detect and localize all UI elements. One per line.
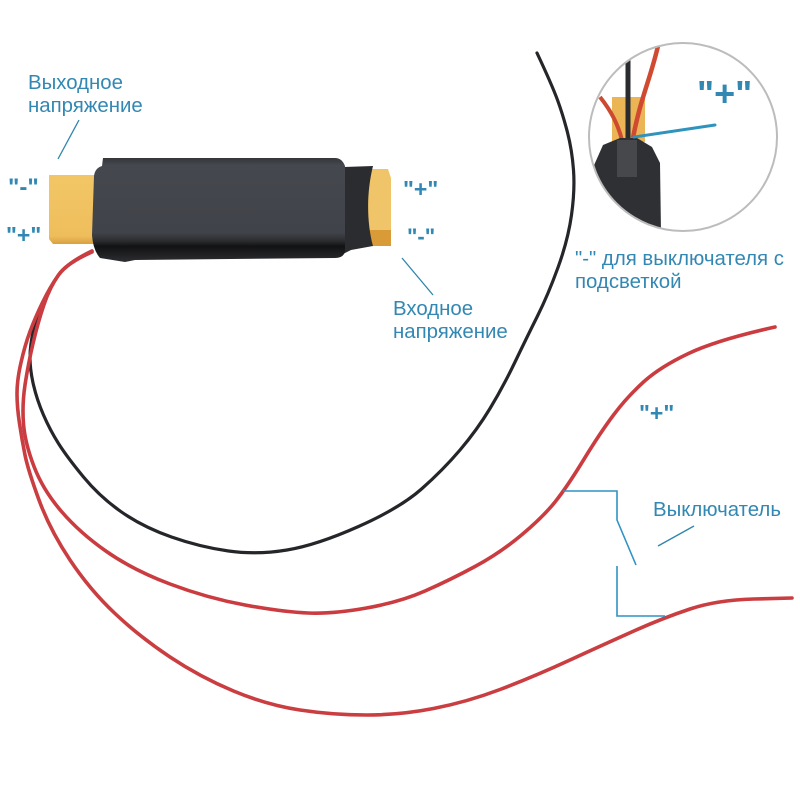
label: output voltage: Выходное [28, 72, 123, 94]
inset leader line [634, 125, 715, 137]
label: minus for lit switch: "-" для выключателя с [575, 248, 784, 270]
module: device with connectors [49, 158, 391, 262]
module body [92, 158, 345, 262]
right connector polarity labels: "+" [403, 176, 438, 202]
inset circle: wire detail [589, 43, 777, 232]
text: напряжение [393, 321, 508, 343]
left output connector [49, 175, 98, 244]
right connector polarity labels: "-" [407, 224, 435, 249]
black wire [30, 53, 574, 553]
label: input voltage: Входное [393, 298, 473, 320]
left connector polarity labels: "+" [6, 222, 41, 248]
switch symbol [563, 491, 665, 616]
leader: switch [658, 526, 694, 546]
right heat shrink [335, 165, 373, 258]
label: switch: Выключатель [653, 499, 781, 521]
leader: output voltage [58, 120, 79, 159]
inset label plus: "+" [697, 73, 752, 114]
text: напряжение [28, 95, 143, 117]
red wire: upper, positive lead [23, 251, 775, 613]
left connector polarity labels: "-" [8, 174, 39, 201]
left connector polarity labels [6, 174, 41, 248]
text: подсветкой [575, 271, 682, 293]
leader: input voltage [402, 258, 433, 295]
right input connector [360, 169, 391, 246]
right connector polarity labels [403, 176, 438, 249]
label: positive wire: "+" [639, 400, 674, 426]
red wire: lower, switch lead [17, 252, 792, 715]
